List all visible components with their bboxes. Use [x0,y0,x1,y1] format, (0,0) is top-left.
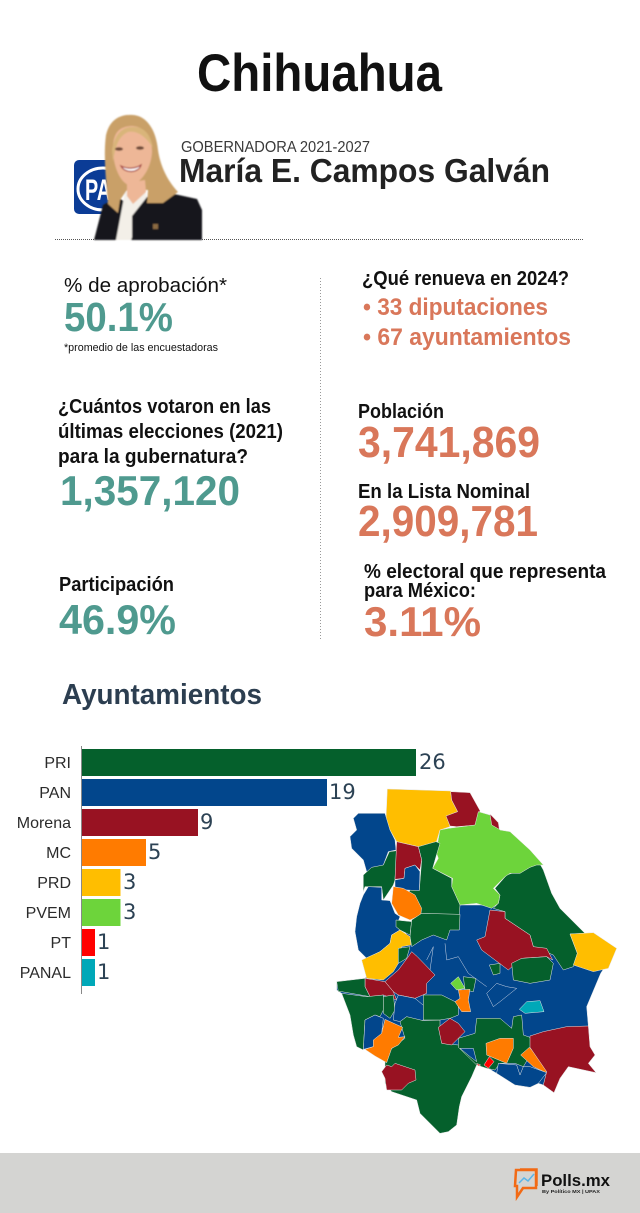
footer band [0,1153,640,1213]
stat: participation [59,574,176,643]
bar chart: ayuntamientos by party: PANAL [20,965,71,982]
stat: approval: *promedio de las encuestadoras [64,342,218,354]
stat: participation: Participación [59,574,174,596]
bar chart: ayuntamientos by party: Morena [17,815,71,832]
stat: renewals 2024: • 67 ayuntamientos [363,324,571,351]
logo: Polls.mx: Polls.mx [541,1171,611,1190]
icon: PAN party logo [74,160,128,214]
bar chart: ayuntamientos by party: PRD [37,875,71,892]
stat: electoral share: para México: [364,580,476,602]
bar chart: ayuntamientos by party: PAN [39,785,71,802]
stat: population: 3,741,869 [358,418,540,467]
bar chart: ayuntamientos by party: PT [51,935,71,952]
bar chart: ayuntamientos by party: MC [46,845,71,862]
bar chart: ayuntamientos by party [17,746,446,994]
bar chart: ayuntamientos by party: 19 [329,780,356,804]
subtitle: role: GOBERNADORA 2021-2027 [181,139,370,156]
stat: approval [64,275,227,354]
stat: participation: 46.9% [59,596,176,643]
stat: electoral share: % electoral que representa [364,561,607,583]
title: Chihuahua [197,44,442,103]
stat: nominal list: En la Lista Nominal [358,481,530,503]
stat: votes 2021: ¿Cuántos votaron en las [58,396,271,418]
bar chart: ayuntamientos by party: PVEM [26,905,71,922]
stat: votes 2021: para la gubernatura? [58,446,248,468]
bar chart: ayuntamientos by party: 1 [97,930,110,954]
bar chart: ayuntamientos by party: 5 [148,840,161,864]
icon: PAN party logo: PA [85,174,111,207]
stat: renewals 2024: ¿Qué renueva en 2024? [362,268,569,290]
stat: approval: % de aprobación* [64,275,227,297]
bar chart: ayuntamientos by party: 1 [97,960,110,984]
bar chart: ayuntamientos by party: 3 [123,870,136,894]
stat: approval: 50.1% [64,294,173,340]
stat: votes 2021: 1,357,120 [60,467,240,514]
bar chart: ayuntamientos by party: 9 [200,810,213,834]
bar chart: ayuntamientos by party: 3 [123,900,136,924]
stat: electoral share [364,561,607,645]
logo: Polls.mx: By Político MX | UPAX [542,1189,600,1194]
stat: votes 2021 [58,396,283,514]
heading: ayuntamientos: Ayuntamientos [62,679,262,711]
bar chart: ayuntamientos by party: 26 [419,750,446,774]
stat: electoral share: 3.11% [364,598,481,645]
logo: Polls.mx [515,1169,611,1197]
stat: renewals 2024: • 33 diputaciones [363,294,548,321]
governor name: María E. Campos Galván [179,152,550,189]
map: Chihuahua municipalities [337,789,617,1133]
stat: votes 2021: últimas elecciones (2021) [58,421,283,443]
stat: population: Población [358,401,444,423]
stat: nominal list: 2,909,781 [358,497,538,546]
portrait: governor [94,115,202,240]
stat: renewals 2024 [362,268,571,351]
bar chart: ayuntamientos by party: PRI [44,755,71,772]
